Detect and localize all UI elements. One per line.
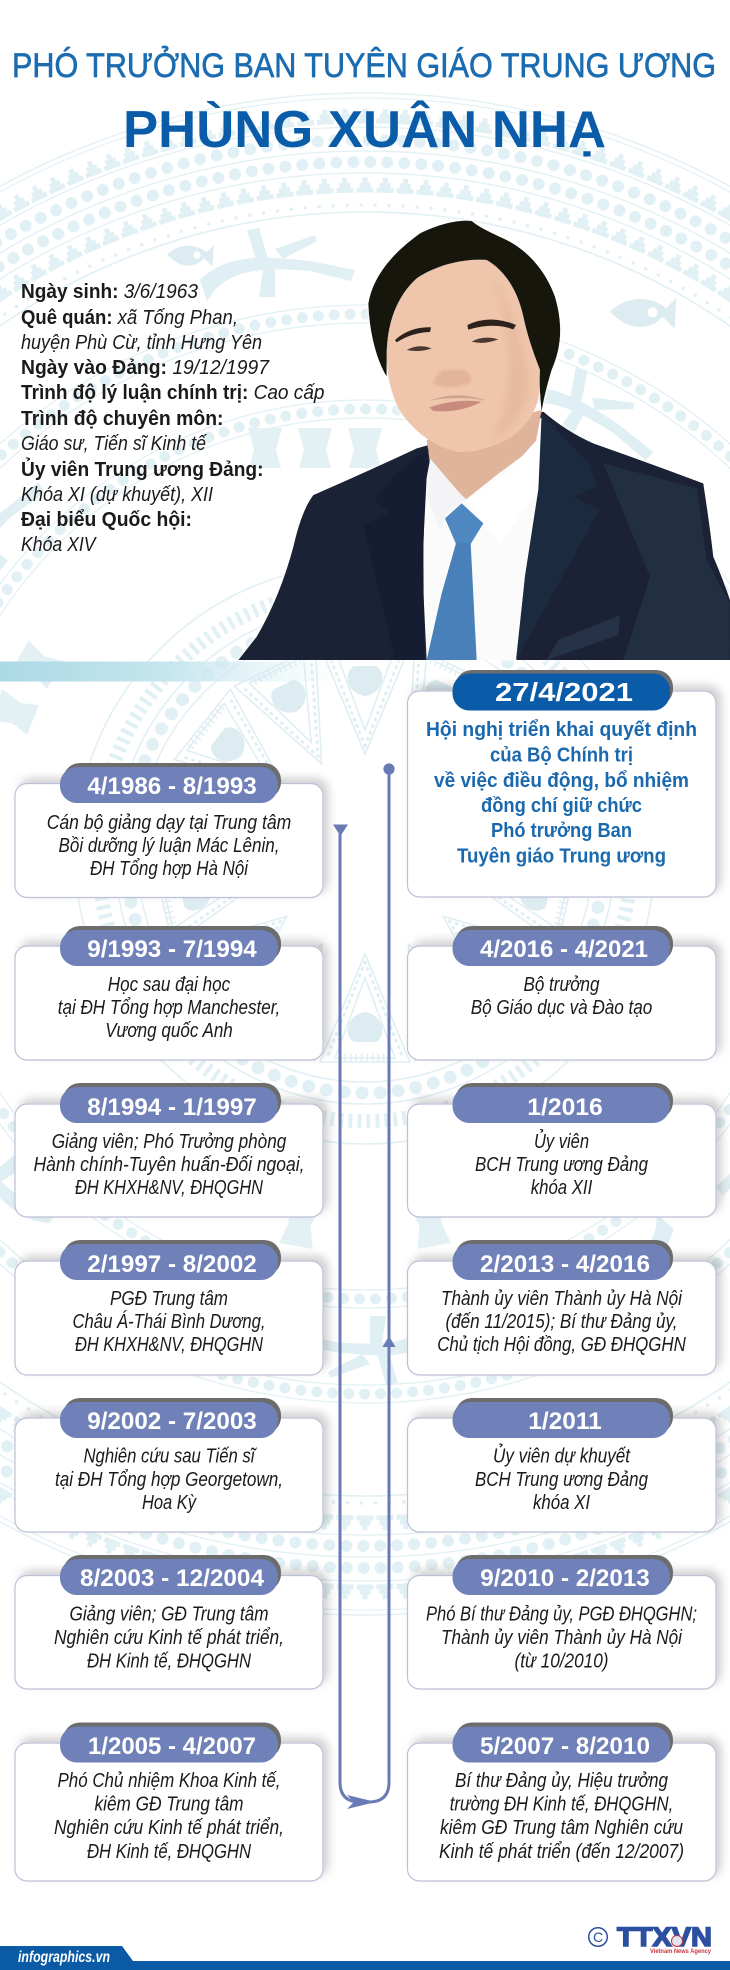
panel: 8/1994 - 1/1997: ĐH KHXH&NV, ĐHQGHN xyxy=(75,1176,263,1199)
icon: TTXVN logo: C xyxy=(593,1929,603,1945)
panel: 8/2003 - 12/2004 xyxy=(15,1555,323,1689)
portrait illustration xyxy=(238,221,730,660)
panel: 2/2013 - 4/2016: Thành ủy viên Thành ủy Hà Nội xyxy=(441,1287,683,1310)
biography details: Khóa XI (dự khuyết), XII xyxy=(21,484,213,506)
panel: 9/2010 - 2/2013: 9/2010 - 2/2013 xyxy=(480,1565,650,1592)
panel: 1/2016: 1/2016 xyxy=(527,1094,603,1121)
panel: 8/2003 - 12/2004: ĐH Kinh tế, ĐHQGHN xyxy=(87,1650,251,1672)
panel: 27/4/2021 highlight: của Bộ Chính trị xyxy=(490,744,633,766)
panel: 5/2007 - 8/2010: kiêm GĐ Trung tâm Nghiên cứu xyxy=(440,1816,683,1839)
panel: 4/1986 - 8/1993: 4/1986 - 8/1993 xyxy=(87,773,257,800)
panel: 8/2003 - 12/2004: Nghiên cứu Kinh tế phát triển, xyxy=(54,1626,284,1649)
panel: 8/1994 - 1/1997: Giảng viên; Phó Trưởng phòng xyxy=(52,1130,287,1153)
panel: 27/4/2021 highlight: về việc điều động, bổ nhiệm xyxy=(434,769,689,792)
panel: 8/1994 - 1/1997: 8/1994 - 1/1997 xyxy=(87,1094,257,1121)
panel: 8/1994 - 1/1997: Hành chính-Tuyên huấn-Đối ngoại, xyxy=(34,1153,304,1176)
panel: 1/2011 xyxy=(408,1398,716,1532)
panel: 27/4/2021 highlight: Tuyên giáo Trung ương xyxy=(457,844,666,868)
icon: TTXVN logo: Vietnam News Agency xyxy=(650,1948,712,1955)
panel: 9/2002 - 7/2003: Nghiên cứu sau Tiến sĩ xyxy=(84,1444,257,1468)
panel: 2/2013 - 4/2016: (đến 11/2015); Bí thư Đảng ủy, xyxy=(446,1310,678,1333)
biography details: Ngày sinh: 3/6/1963 xyxy=(21,281,198,303)
panel: 27/4/2021 highlight xyxy=(408,670,716,897)
panel: 1/2011: khóa XI xyxy=(533,1491,590,1514)
panel: 8/2003 - 12/2004: 8/2003 - 12/2004 xyxy=(80,1565,265,1592)
panel: 9/1993 - 7/1994: Học sau đại học xyxy=(108,973,231,996)
panel: 4/2016 - 4/2021: 4/2016 - 4/2021 xyxy=(480,936,648,963)
panel: 4/1986 - 8/1993: ĐH Tổng hợp Hà Nội xyxy=(90,857,249,880)
panel: 27/4/2021 highlight: Phó trưởng Ban xyxy=(491,819,632,842)
panel: 27/4/2021 highlight: 27/4/2021 xyxy=(495,677,633,707)
biography details: Ngày vào Đảng: 19/12/1997 xyxy=(21,357,270,379)
panel: 2/1997 - 8/2002 xyxy=(15,1240,323,1375)
panel: 1/2011: BCH Trung ương Đảng xyxy=(475,1468,648,1491)
biography details: Giáo sư, Tiến sĩ Kinh tế xyxy=(21,433,208,455)
panel: 1/2016: Ủy viên xyxy=(534,1129,589,1153)
biography details: Trình độ chuyên môn: xyxy=(21,408,224,430)
panel: 9/1993 - 7/1994: Vương quốc Anh xyxy=(105,1019,233,1042)
panel: 1/2016: khóa XII xyxy=(531,1176,592,1199)
panel: 9/2002 - 7/2003: 9/2002 - 7/2003 xyxy=(87,1408,257,1435)
panel: 1/2005 - 4/2007: Nghiên cứu Kinh tế phát triển, xyxy=(54,1816,284,1839)
panel: 2/1997 - 8/2002: 2/1997 - 8/2002 xyxy=(87,1251,257,1278)
icon: TTXVN logo xyxy=(589,1922,712,1955)
panel: 9/2002 - 7/2003: tại ĐH Tổng hợp Georgetown, xyxy=(55,1468,283,1491)
panel: 27/4/2021 highlight: đồng chí giữ chức xyxy=(481,794,642,817)
biography details: huyện Phù Cừ, tỉnh Hưng Yên xyxy=(21,332,262,354)
panel: 9/2010 - 2/2013: (từ 10/2010) xyxy=(514,1650,608,1672)
panel: 5/2007 - 8/2010 xyxy=(408,1722,716,1881)
biography details: Khóa XIV xyxy=(21,534,97,556)
panel: 8/2003 - 12/2004: Giảng viên; GĐ Trung tâm xyxy=(70,1602,268,1626)
panel: 2/1997 - 8/2002: ĐH KHXH&NV, ĐHQGHN xyxy=(75,1333,263,1356)
panel: 9/2002 - 7/2003 xyxy=(15,1398,323,1532)
biography details: Ủy viên Trung ương Đảng: xyxy=(21,457,264,481)
panel: 9/1993 - 7/1994 xyxy=(15,926,323,1060)
panel: 1/2005 - 4/2007: Phó Chủ nhiệm Khoa Kinh tế, xyxy=(58,1769,280,1792)
icon: TTXVN logo: TTXVN xyxy=(617,1922,712,1952)
panel: 9/1993 - 7/1994: 9/1993 - 7/1994 xyxy=(87,936,257,963)
timeline connector arrows xyxy=(333,763,396,1809)
panel: 5/2007 - 8/2010: trường ĐH Kinh tế, ĐHQGHN, xyxy=(450,1792,673,1816)
panel: 2/2013 - 4/2016 xyxy=(408,1240,716,1375)
panel: 4/1986 - 8/1993: Cán bộ giảng dạy tại Trung tâm xyxy=(47,811,291,834)
biography details: Đại biểu Quốc hội: xyxy=(21,509,192,531)
biography details: Trình độ lý luận chính trị: Cao cấp xyxy=(21,382,324,404)
panel: 4/2016 - 4/2021: Bộ Giáo dục và Đào tạo xyxy=(471,996,652,1019)
panel: 9/1993 - 7/1994: tại ĐH Tổng hợp Manchester, xyxy=(58,996,280,1019)
panel: 1/2011: 1/2011 xyxy=(528,1408,602,1435)
biography details xyxy=(21,281,324,556)
background: bronze drum pattern xyxy=(0,93,730,1615)
panel: 9/2002 - 7/2003: Hoa Kỳ xyxy=(142,1491,197,1514)
panel: 1/2005 - 4/2007: kiêm GĐ Trung tâm xyxy=(94,1792,244,1816)
panel: 4/2016 - 4/2021: Bộ trưởng xyxy=(524,973,600,996)
panel: 2/2013 - 4/2016: 2/2013 - 4/2016 xyxy=(480,1251,650,1278)
panel: 9/2010 - 2/2013: Thành ủy viên Thành ủy Hà Nội xyxy=(441,1626,683,1649)
panel: 1/2011: Ủy viên dự khuyết xyxy=(493,1444,631,1468)
panel: 1/2016: BCH Trung ương Đảng xyxy=(475,1153,648,1176)
panel: 1/2005 - 4/2007: 1/2005 - 4/2007 xyxy=(88,1733,256,1760)
panel: 1/2016 xyxy=(408,1083,716,1217)
footer bar: infographics.vn xyxy=(18,1949,110,1966)
panel: 2/1997 - 8/2002: Châu Á-Thái Bình Dương, xyxy=(72,1310,266,1333)
footer bar xyxy=(0,1946,730,1970)
panel: 5/2007 - 8/2010: Kinh tế phát triển (đến 12/2007) xyxy=(439,1840,684,1863)
panel: 4/1986 - 8/1993: Bồi dưỡng lý luận Mác Lênin, xyxy=(58,834,280,857)
panel: 1/2005 - 4/2007 xyxy=(15,1722,323,1881)
panel: 27/4/2021 highlight: Hội nghị triển khai quyết định xyxy=(426,718,697,741)
title line 2: name: PHÙNG XUÂN NHẠ xyxy=(123,100,606,159)
panel: 9/2010 - 2/2013 xyxy=(408,1555,716,1689)
panel: 1/2005 - 4/2007: ĐH Kinh tế, ĐHQGHN xyxy=(87,1840,251,1863)
panel: 8/1994 - 1/1997 xyxy=(15,1083,323,1217)
decorative band under portrait xyxy=(0,662,340,682)
panel: 5/2007 - 8/2010: 5/2007 - 8/2010 xyxy=(480,1733,650,1760)
biography details: Quê quán: xã Tống Phan, xyxy=(21,307,238,329)
panel: 5/2007 - 8/2010: Bí thư Đảng ủy, Hiệu trưởng xyxy=(455,1769,668,1792)
panel: 4/2016 - 4/2021 xyxy=(408,926,716,1060)
panel: 2/1997 - 8/2002: PGĐ Trung tâm xyxy=(110,1287,228,1310)
panel: 4/1986 - 8/1993 xyxy=(15,763,323,898)
